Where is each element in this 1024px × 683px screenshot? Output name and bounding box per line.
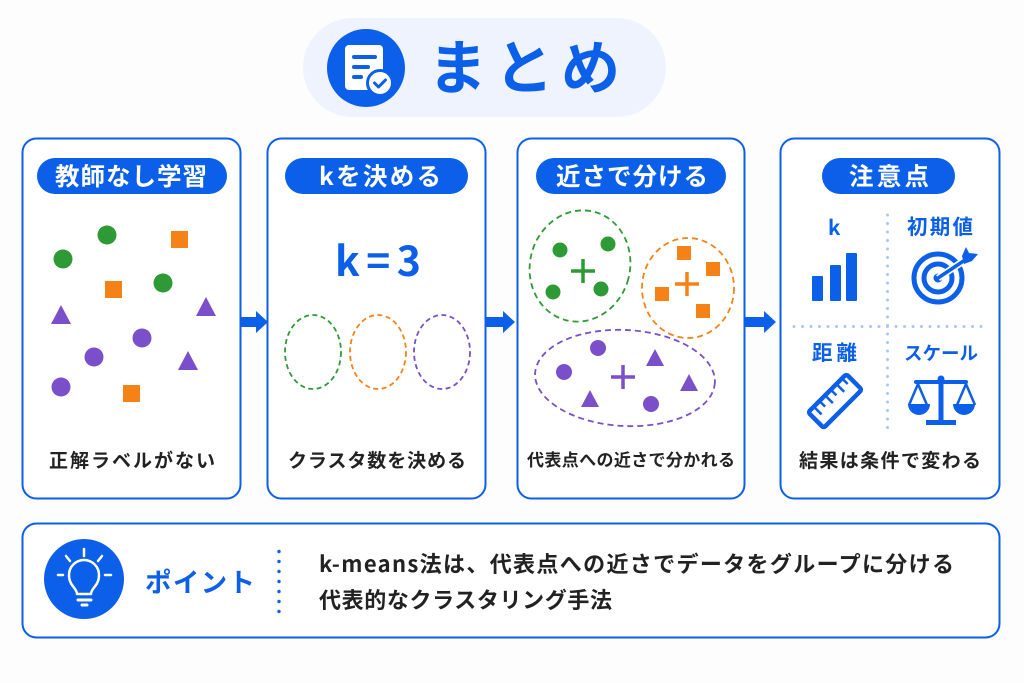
icon: balance scale [908, 376, 975, 425]
arrow [745, 311, 776, 333]
point message [319, 547, 954, 615]
title banner [303, 18, 666, 117]
panel: choose k [268, 138, 486, 498]
orange cluster [642, 238, 734, 338]
label scale: スケール [904, 340, 978, 366]
label: point: ポイント [145, 561, 255, 600]
label distance: 距離 [812, 336, 857, 366]
icon: document with check [327, 29, 405, 107]
arrow [240, 311, 268, 333]
panel caption: 結果は条件で変わる [799, 446, 981, 473]
icon: target [914, 247, 978, 302]
label k: k [828, 211, 841, 241]
panel heading: 教師なし学習 [55, 158, 207, 193]
panel caption: 代表点への近さで分かれる [527, 446, 735, 471]
arrow [485, 311, 515, 333]
icon: ruler [808, 374, 862, 428]
panel heading: 近さで分ける [556, 158, 708, 193]
panel caption: クラスタ数を決める [288, 446, 466, 473]
point message: 代表的なクラスタリング手法 [319, 583, 612, 615]
scattered data points [51, 226, 216, 402]
panel heading [285, 158, 468, 194]
panel: key point [22, 524, 1000, 638]
three empty clusters [285, 315, 470, 389]
title text: まとめ [428, 21, 620, 106]
purple cluster [533, 325, 717, 431]
panel: unsupervised learning [22, 138, 240, 498]
panel: cautions [780, 138, 1000, 498]
icon: light bulb [44, 539, 124, 619]
panel: split by proximity [517, 138, 744, 498]
panel heading: 注意点 [849, 158, 929, 193]
point message: k-means法は、代表点への近さでデータをグループに分ける [319, 547, 954, 579]
panel heading: kを決める [319, 158, 441, 193]
k equals 3: k=3 [335, 228, 421, 288]
label initial value: 初期値 [907, 210, 973, 240]
panel caption: 正解ラベルがない [49, 446, 215, 473]
panel heading [822, 158, 955, 194]
icon: bar chart [812, 253, 857, 301]
green cluster [517, 199, 643, 333]
